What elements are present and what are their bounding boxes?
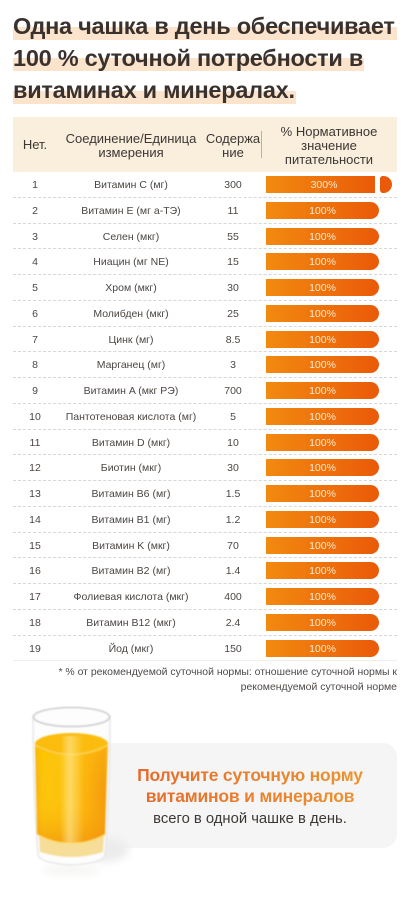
row 15: 100% — [309, 540, 336, 552]
row 11: 100% — [309, 436, 336, 448]
row 8: Марганец (мг) — [97, 359, 165, 371]
row 4: 100% — [309, 256, 336, 268]
row 6 — [13, 301, 397, 326]
row 9: 100% — [309, 385, 336, 397]
table header: Нет. — [23, 137, 47, 152]
row 14: Витамин B1 (мг) — [91, 514, 170, 526]
table header — [13, 117, 397, 172]
row 14: 1.2 — [226, 514, 240, 526]
row 12: Биотин (мкг) — [101, 462, 161, 474]
row 8: 8 — [32, 359, 38, 371]
row 12: 12 — [29, 462, 41, 474]
row 6: 25 — [227, 308, 239, 320]
row 3: 3 — [32, 230, 38, 242]
callout text: всего в одной чашке в день. — [153, 810, 347, 826]
title: Одна чашка в день обеспечивает — [13, 13, 395, 39]
row 3: Селен (мкг) — [103, 230, 159, 242]
row 4: Ниацин (мг NE) — [93, 256, 169, 268]
row 1: vitamin C: 300 — [224, 179, 242, 191]
row 2: Витамин E (мг а-ТЭ) — [81, 205, 181, 217]
row 1: vitamin C: 1 — [32, 179, 38, 191]
row 15: 70 — [227, 540, 239, 552]
row 14: 14 — [29, 514, 41, 526]
glass body — [33, 717, 110, 865]
row 4 — [13, 249, 397, 275]
title: 100 % суточной потребности в — [13, 45, 363, 71]
row 12: 30 — [227, 462, 239, 474]
row 18: 100% — [309, 617, 336, 629]
row 19: 19 — [29, 642, 41, 654]
table header: % Нормативное значение питательности — [281, 124, 377, 167]
row 13: 13 — [29, 488, 41, 500]
row 18: 2.4 — [226, 617, 240, 629]
row 1: vitamin C: 300% — [311, 179, 337, 191]
row 16: Витамин B2 (мг) — [91, 565, 170, 577]
row 6: 100% — [309, 308, 336, 320]
row 8: 3 — [230, 359, 236, 371]
row 17: 100% — [309, 591, 336, 603]
table header: Содержа — [206, 131, 260, 146]
row 11: 10 — [227, 436, 239, 448]
row 17 — [13, 584, 397, 610]
row 18: 18 — [29, 617, 41, 629]
row 1: vitamin C — [13, 172, 397, 198]
row 2: 100% — [309, 205, 336, 217]
row 12 — [13, 455, 397, 481]
callout text: Получите суточную норму — [137, 765, 363, 785]
row 3 — [13, 224, 397, 249]
row 4: 4 — [32, 256, 38, 268]
glass shadow — [81, 838, 129, 862]
row 10: 5 — [230, 411, 236, 423]
row 17: 400 — [224, 591, 242, 603]
row 3: 100% — [309, 230, 336, 242]
table header: ние — [222, 145, 244, 160]
row 18: Витамин B12 (мкг) — [86, 617, 176, 629]
callout text: витаминов и минералов — [146, 786, 354, 806]
row 15: Витамин K (мкг) — [92, 540, 170, 552]
title — [13, 13, 397, 104]
row 10: Пантотеновая кислота (мг) — [66, 411, 196, 423]
row 19 — [13, 636, 397, 661]
table header: Соединение/Единица измерения — [66, 131, 196, 160]
row 10: 10 — [29, 411, 41, 423]
row 1: vitamin C: Витамин C (мг) — [94, 179, 168, 191]
title: витаминах и минералах. — [13, 77, 295, 103]
footnote: * % от рекомендуемой суточной нормы: отношение суточной нормы к рекомендуемой суточной норме — [58, 667, 397, 693]
row 11: Витамин D (мкг) — [92, 436, 170, 448]
row 2 — [13, 198, 397, 224]
row 8 — [13, 352, 397, 378]
row 18 — [13, 610, 397, 636]
row 14: 100% — [309, 514, 336, 526]
row 8: 100% — [309, 359, 336, 371]
nutrient table rows — [13, 176, 397, 661]
icon: glass of orange juice — [32, 706, 128, 874]
row 16: 16 — [29, 565, 41, 577]
row 19: 150 — [224, 642, 242, 654]
callout text — [137, 765, 363, 826]
row 6: 6 — [32, 308, 38, 320]
row 13: Витамин B6 (мг) — [91, 488, 170, 500]
row 15: 15 — [29, 540, 41, 552]
row 6: Молибден (мкг) — [93, 308, 169, 320]
row 5: 30 — [227, 282, 239, 294]
row 9: 700 — [224, 385, 242, 397]
row 3: 55 — [227, 230, 239, 242]
row 4: 15 — [227, 256, 239, 268]
row 2: 2 — [32, 205, 38, 217]
row 13 — [13, 481, 397, 507]
row 2: 11 — [228, 205, 238, 217]
juice at base of glass — [39, 835, 104, 857]
callout panel — [100, 743, 397, 848]
row 9: Витамин A (мкг РЭ) — [84, 385, 178, 397]
row 15 — [13, 532, 397, 558]
row 10: 100% — [309, 411, 336, 423]
row 11 — [13, 430, 397, 455]
row 7 — [13, 326, 397, 352]
row 13: 100% — [309, 488, 336, 500]
row 7: 100% — [309, 334, 336, 346]
row 19: Йод (мкг) — [109, 642, 153, 654]
row 9: 9 — [32, 385, 38, 397]
row 5: 100% — [309, 282, 336, 294]
row 13: 1.5 — [226, 488, 240, 500]
row 10 — [13, 404, 397, 430]
row 19: 100% — [309, 642, 336, 654]
row 12: 100% — [309, 462, 336, 474]
row 5: Хром (мкг) — [105, 282, 157, 294]
row 16: 100% — [309, 565, 336, 577]
row 14 — [13, 507, 397, 532]
row 11: 11 — [30, 436, 40, 448]
glass reflection — [41, 865, 101, 875]
row 7: 7 — [32, 334, 38, 346]
row 16 — [13, 558, 397, 584]
juice body — [35, 733, 108, 844]
row 7: Цинк (мг) — [108, 334, 153, 346]
row 9 — [13, 378, 397, 404]
glass rim — [34, 708, 110, 726]
row 17: 17 — [29, 591, 41, 603]
row 17: Фолиевая кислота (мкг) — [74, 591, 188, 603]
row 5: 5 — [32, 282, 38, 294]
row 7: 8.5 — [226, 334, 240, 346]
row 5 — [13, 275, 397, 301]
row 16: 1.4 — [226, 565, 240, 577]
